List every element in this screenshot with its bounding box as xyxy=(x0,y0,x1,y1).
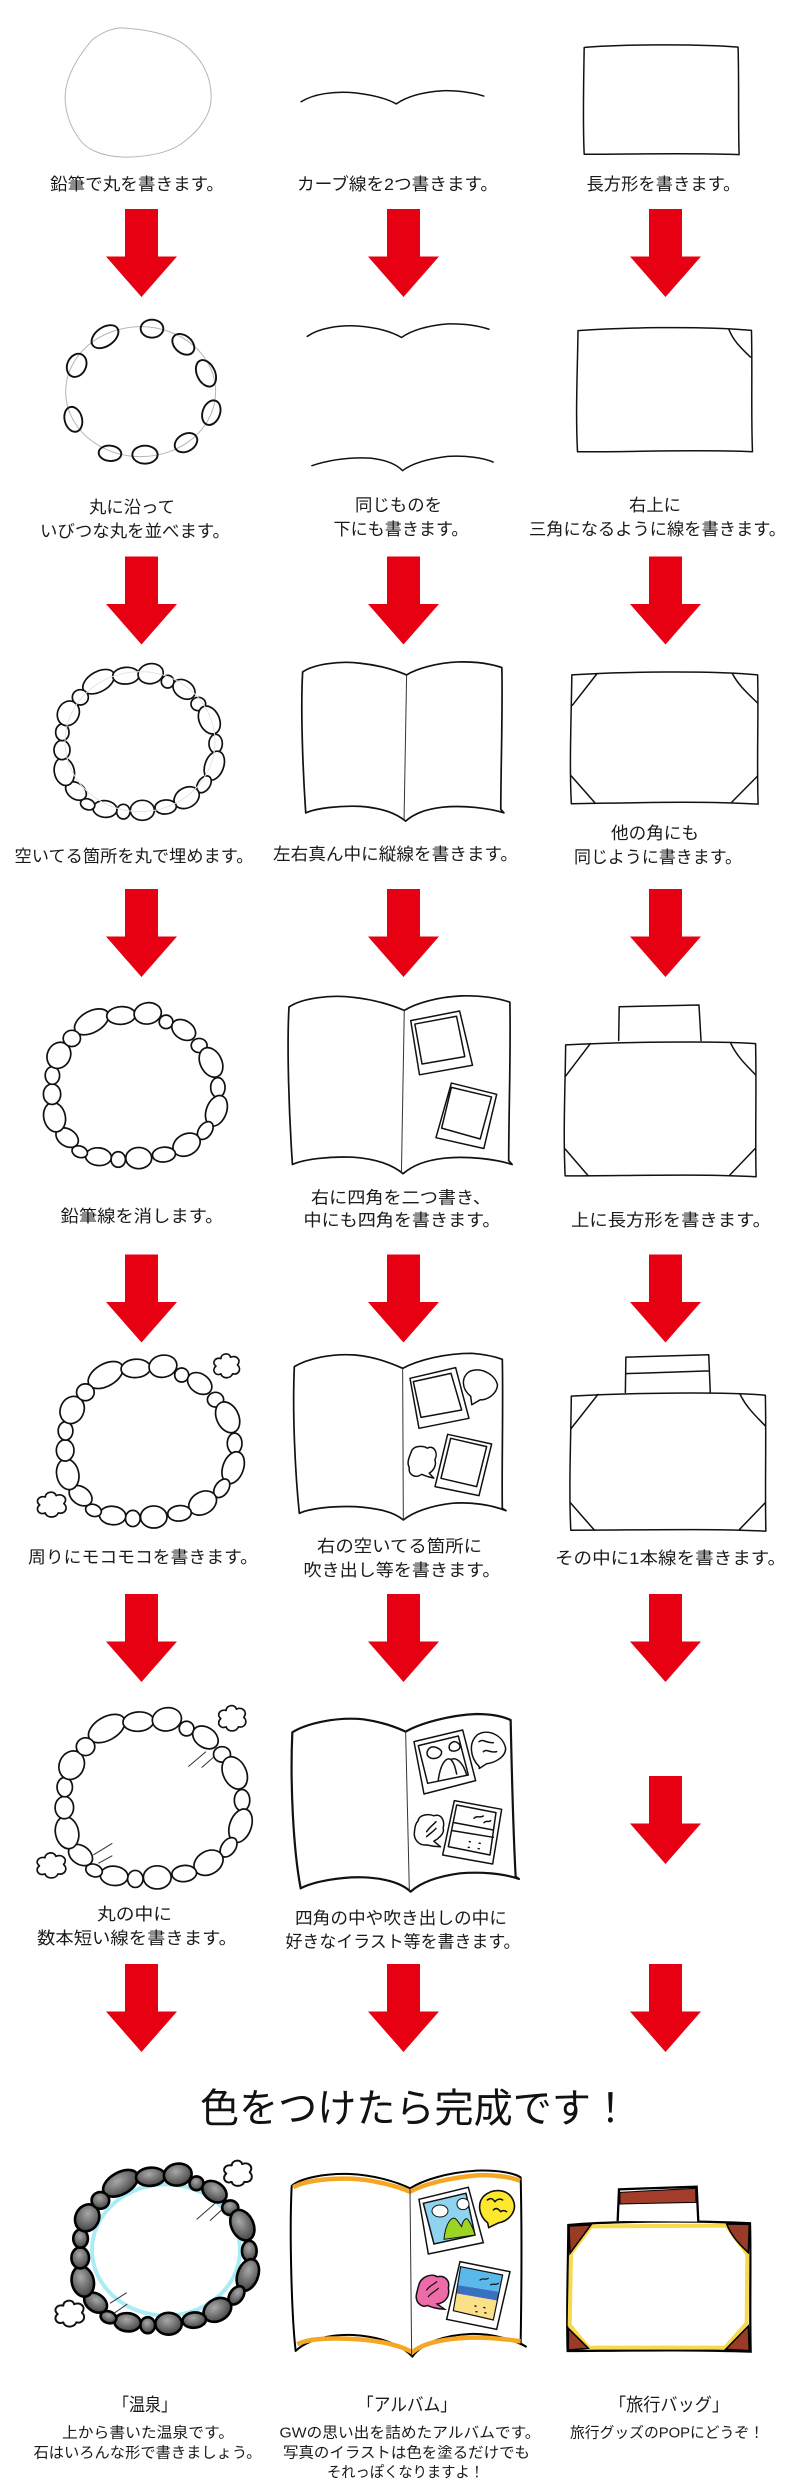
caption: column 3 step 2: 右上に xyxy=(629,496,681,515)
caption: column 2 step 4 xyxy=(304,1188,500,1230)
caption: column 3 step 1: 長方形を書きます。 xyxy=(586,175,740,194)
orange page edges xyxy=(293,2175,521,2352)
caption: column 2 step 5: 吹き出し等を書きます。 xyxy=(304,1561,500,1580)
caption: column 2 step 6 xyxy=(286,1909,520,1952)
heading: finished message: 色をつけたら完成です！ xyxy=(200,2087,630,2131)
caption: column 3 step 4: 上に長方形を書きます。 xyxy=(571,1211,771,1230)
arrows row 4 xyxy=(106,1254,701,1342)
column 2 step 1: two curves xyxy=(301,91,484,104)
column 3 step 1: rectangle xyxy=(583,45,739,155)
caption: column 2 step 2: 同じものを xyxy=(355,496,442,515)
column 2 step 5: book with photos, speech bubble and cloud xyxy=(294,1353,506,1520)
spine xyxy=(410,2188,412,2357)
caption: column 3 step 3: 同じように書きます。 xyxy=(574,848,742,867)
stones xyxy=(69,2161,263,2335)
photo frames xyxy=(411,1011,497,1149)
column 1 step 5: ring with steam puffs xyxy=(37,1353,248,1528)
column 2 step 3: book outline xyxy=(302,662,504,821)
caption: column 1 step 1: 鉛筆で丸を書きます。 xyxy=(50,175,224,194)
column 1 step 2: pebbles along circle xyxy=(62,320,224,464)
final illustration: album xyxy=(291,2171,526,2357)
caption: column 2 step 1: カーブ線を2つ書きます。 xyxy=(297,174,498,194)
arrows row 2 xyxy=(106,556,701,644)
final illustration: travel bag xyxy=(567,2187,751,2352)
photo illustrations and bubble xyxy=(414,1730,506,1864)
caption: column 3 step 3 xyxy=(574,824,742,867)
caption: column 2 step 4: 中にも四角を書きます。 xyxy=(304,1211,500,1230)
final caption: hot spring xyxy=(34,2395,262,2462)
column 2 step 4: book with two photos xyxy=(288,996,512,1174)
final illustration: hot spring xyxy=(55,2161,263,2335)
photos and speech shapes xyxy=(408,1368,498,1496)
final caption: travel bag: 旅行グッズのPOPにどうぞ！ xyxy=(570,2424,764,2442)
yellow speech bubble xyxy=(480,2191,514,2228)
final caption: hot spring: 石はいろんな形で書きましょう。 xyxy=(34,2444,262,2462)
handle xyxy=(618,2187,698,2222)
arrows row 1 xyxy=(106,209,701,297)
column 3 step 5: suitcase with handle line xyxy=(570,1355,766,1531)
column 1 step 1: pencil circle xyxy=(65,28,211,157)
caption: column 1 step 6: 丸の中に xyxy=(97,1905,172,1924)
caption: column 2 step 3: 左右真ん中に縦線を書きます。 xyxy=(273,845,518,864)
column 2 step 2: top and bottom curves xyxy=(307,324,493,471)
photo 1 xyxy=(419,2187,483,2254)
photo 2 xyxy=(447,2262,510,2329)
caption: column 2 step 2 xyxy=(334,496,468,539)
pink cloud xyxy=(416,2275,449,2309)
caption: column 1 step 5: 周りにモコモコを書きます。 xyxy=(28,1548,258,1567)
arrows row 3 xyxy=(106,889,701,977)
extra arrow column 3 xyxy=(630,1776,701,1864)
column 1 step 4: ring without pencil line xyxy=(41,1001,231,1169)
yellow border xyxy=(570,2226,747,2348)
body xyxy=(567,2222,751,2352)
final caption: album: GWの思い出を詰めたアルバムです。 xyxy=(280,2424,540,2442)
caption: column 1 step 6: 数本短い線を書きます。 xyxy=(37,1929,237,1948)
caption: column 1 step 3: 空いてる箇所を丸で埋めます。 xyxy=(14,847,254,866)
caption: column 3 step 5: その中に1本線を書きます。 xyxy=(555,1549,786,1568)
column 3 step 3: rectangle with four corners xyxy=(570,672,758,804)
caption: column 2 step 6: 四角の中や吹き出しの中に xyxy=(295,1909,507,1928)
caption: column 1 step 6 xyxy=(37,1905,237,1948)
caption: column 2 step 4: 右に四角を二つ書き、 xyxy=(311,1188,491,1208)
caption: column 1 step 2 xyxy=(40,498,230,541)
caption: column 2 step 2: 下にも書きます。 xyxy=(334,520,468,539)
water glow xyxy=(92,2184,240,2316)
page shape xyxy=(291,2171,526,2357)
column 3 step 2: rectangle with top-right corner xyxy=(577,328,752,452)
caption: column 2 step 5 xyxy=(304,1537,500,1580)
caption: column 1 step 4: 鉛筆線を消します。 xyxy=(60,1207,224,1226)
column 1 step 6: ring with short lines xyxy=(37,1705,257,1889)
arrows row 6 xyxy=(106,1964,701,2052)
final caption: album xyxy=(280,2395,540,2481)
caption: column 2 step 5: 右の空いてる箇所に xyxy=(317,1537,482,1556)
arrows row 5 xyxy=(106,1594,701,1682)
caption: column 3 step 2 xyxy=(529,496,786,539)
handle band xyxy=(620,2188,696,2204)
column 3 step 4: suitcase with handle rectangle xyxy=(564,1005,756,1177)
caption: column 1 step 2: 丸に沿って xyxy=(89,498,175,517)
caption: column 2 step 6: 好きなイラスト等を書きます。 xyxy=(286,1932,520,1952)
final caption: hot spring: 「温泉」 xyxy=(113,2395,177,2415)
final caption: hot spring: 上から書いた温泉です。 xyxy=(62,2424,234,2442)
final caption: travel bag xyxy=(570,2395,764,2442)
final caption: album: それっぽくなりますよ！ xyxy=(327,2464,484,2481)
column 1 step 3: filled stone ring xyxy=(52,662,228,820)
caption: column 1 step 2: いびつな丸を並べます。 xyxy=(40,522,230,541)
brown corners xyxy=(568,2224,749,2351)
column 2 step 6: book with illustrated photos xyxy=(292,1714,519,1892)
final caption: album: 写真のイラストは色を塗るだけでも xyxy=(283,2444,530,2462)
caption: column 3 step 2: 三角になるように線を書きます。 xyxy=(529,520,786,539)
caption: column 3 step 3: 他の角にも xyxy=(611,824,699,843)
final caption: album: 「アルバム」 xyxy=(357,2395,457,2415)
final caption: travel bag: 「旅行バッグ」 xyxy=(609,2395,729,2415)
